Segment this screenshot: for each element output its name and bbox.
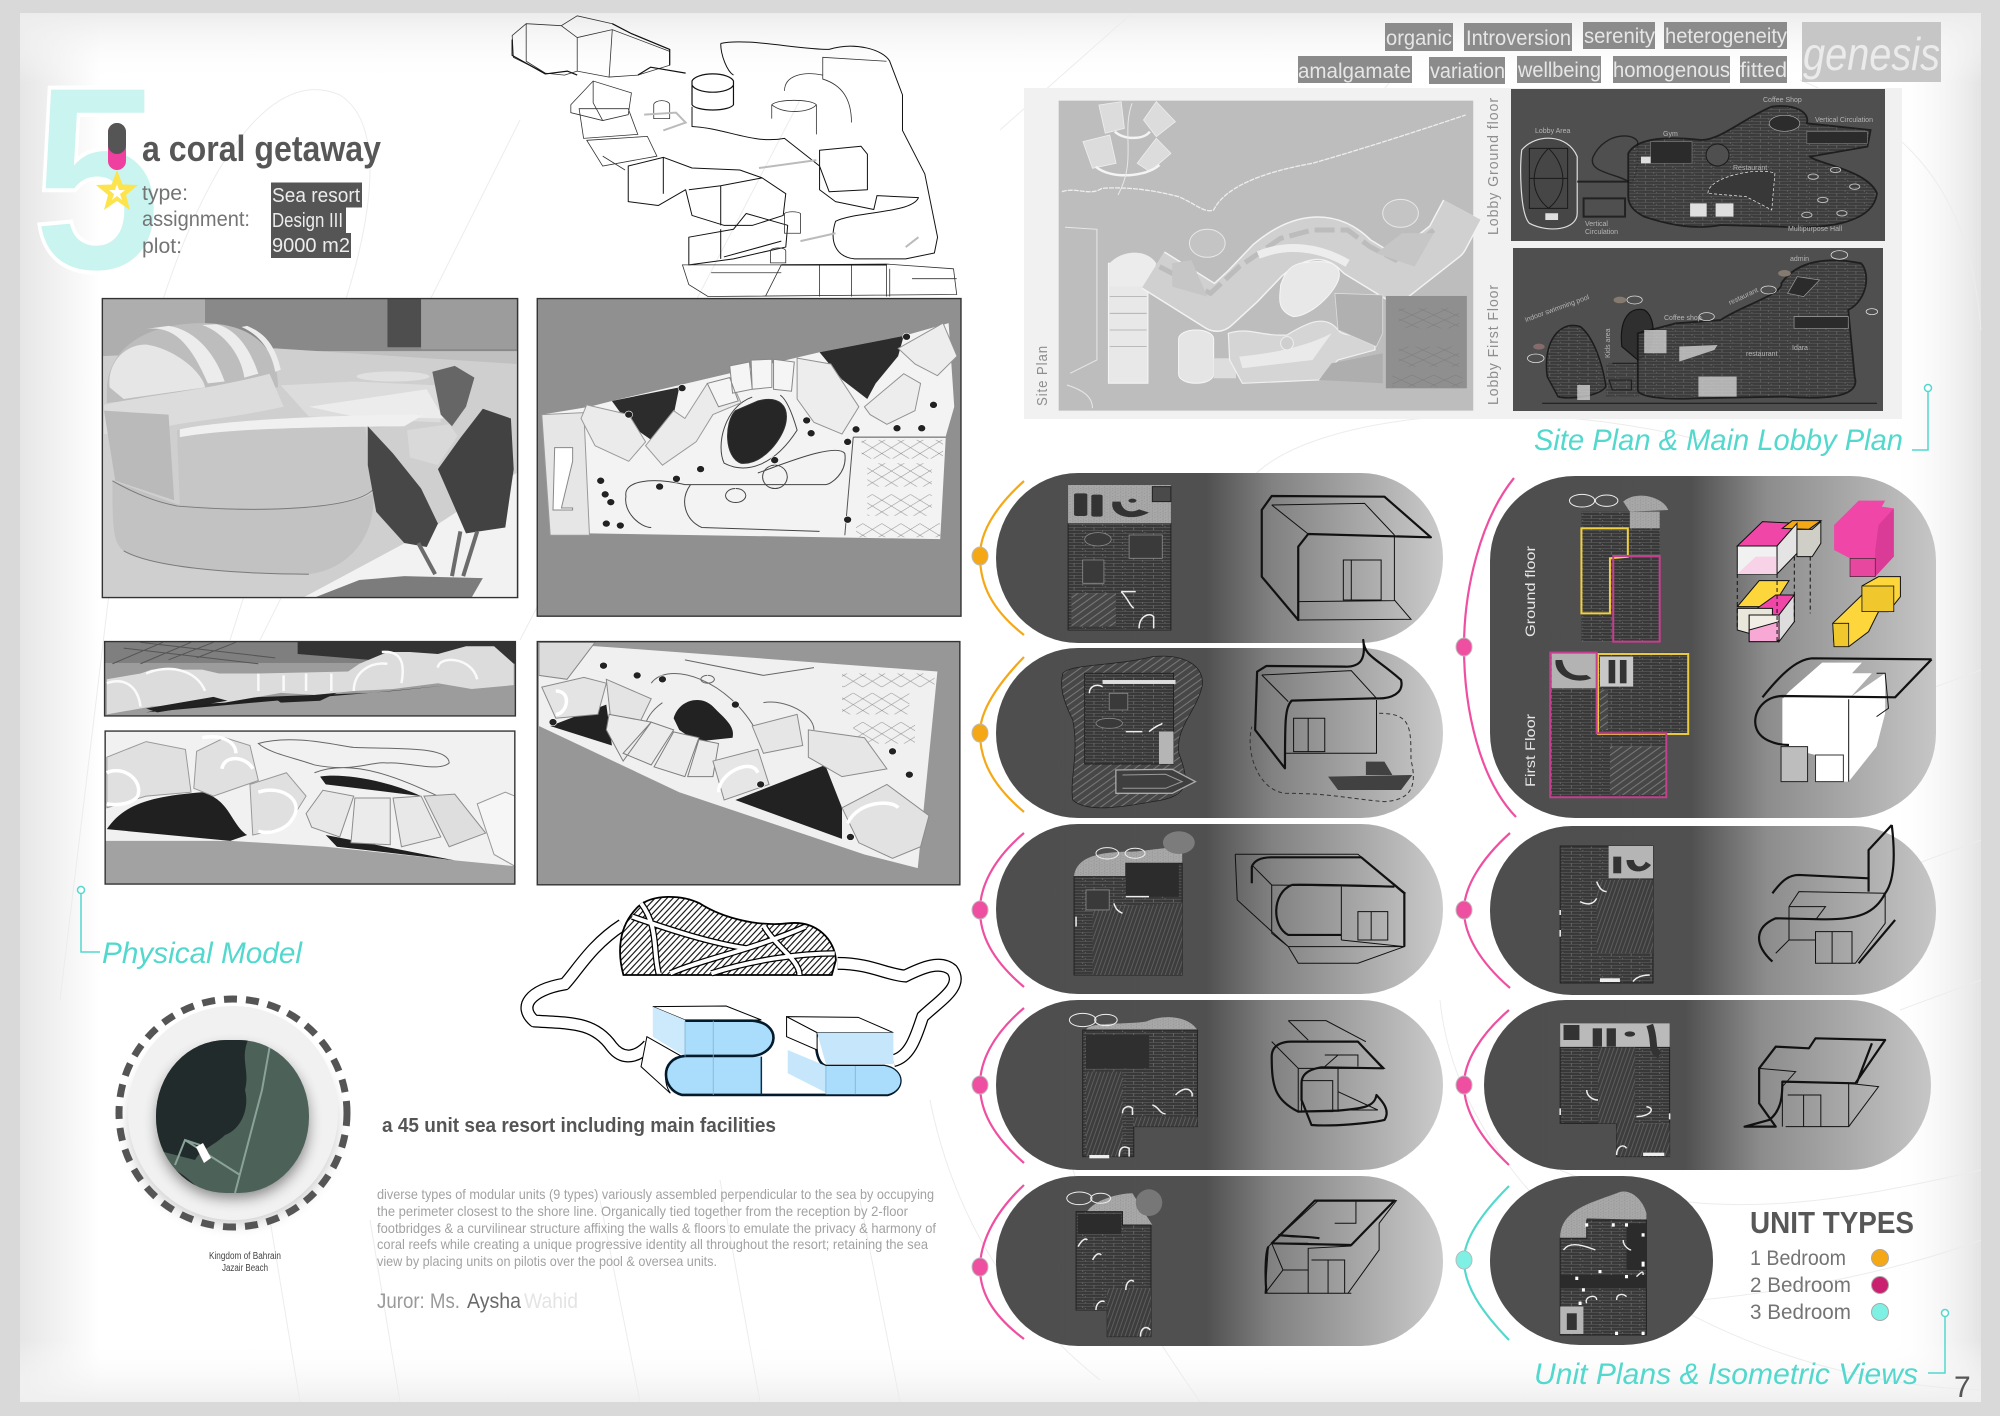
keyword tags: wellbeing <box>1517 59 1601 82</box>
panel: site plan and lobby plans <box>1024 88 1902 419</box>
location map: Kingdom of Bahrain <box>209 1251 281 1262</box>
juror credit: Aysha <box>467 1290 521 1313</box>
lobby ground floor plan: Multipurpose Hall <box>1788 226 1843 233</box>
lobby first floor plan: restaurant <box>1746 351 1778 358</box>
lobby ground floor plan: Vertical <box>1585 221 1608 228</box>
legend: unit types: 1 Bedroom <box>1750 1247 1846 1270</box>
lobby first floor plan: Idara <box>1792 345 1808 352</box>
keyword tags: homogenous <box>1613 59 1730 82</box>
keyword tags: fitted <box>1740 59 1787 82</box>
project info: Design III <box>272 210 343 232</box>
project info: type: <box>142 182 188 205</box>
floor labels <box>1522 546 1538 787</box>
photo: model oblique view <box>537 642 960 885</box>
juror credit: Juror: Ms. <box>377 1290 460 1313</box>
description paragraph: the perimeter closest to the shore line. Organically tied together from the reception by 2-floor <box>377 1203 908 1219</box>
legend: unit types: UNIT TYPES <box>1750 1205 1914 1240</box>
lobby first floor plan: admin <box>1790 256 1809 263</box>
keyword tags: variation <box>1430 60 1505 83</box>
heading: physical model: Physical Model <box>102 937 303 970</box>
vertical plan labels: Site Plan <box>1034 345 1051 406</box>
lobby ground floor plan <box>1511 89 1885 241</box>
lobby ground floor plan: Gym <box>1663 131 1678 138</box>
keyword tags: organic <box>1386 27 1452 50</box>
genesis tag: genesis <box>1803 28 1940 80</box>
page number: 7 <box>1954 1371 1971 1404</box>
lobby first floor plan: Coffee shop <box>1664 315 1702 322</box>
title: a coral getaway <box>142 128 381 169</box>
lobby ground floor plan: Restaurant <box>1733 165 1767 172</box>
vertical plan labels: Lobby First Floor <box>1485 284 1502 405</box>
unit capsule: 2 bedroom C <box>972 1176 1443 1346</box>
unit capsule: 3 bedroom duplex with exploded isometric <box>1456 476 1936 818</box>
project info: plot: <box>142 235 182 258</box>
subtitle: a 45 unit sea resort including main facilities <box>382 1115 776 1137</box>
unit capsule: 2 bedroom D <box>1456 825 1936 995</box>
description paragraph: coral reefs while creating a unique progressive identity all throughout the resort; retaining the sea <box>377 1236 928 1252</box>
photo: close-up units <box>105 731 515 884</box>
photo: long section view <box>105 642 515 716</box>
site plan <box>1059 101 1473 411</box>
keyword tags: serenity <box>1584 25 1655 48</box>
legend: unit types <box>1750 1205 1914 1324</box>
unit capsule: 1 bedroom A <box>972 473 1443 643</box>
icon: yellow star <box>96 170 138 210</box>
project info: assignment: <box>142 208 250 231</box>
lobby first floor plan: Kids area <box>1605 328 1612 358</box>
heading: site plan and main lobby plan: Site Plan & Main Lobby Plan <box>1534 424 1903 457</box>
description paragraph <box>377 1186 936 1269</box>
axonometric line drawing <box>512 16 957 296</box>
floor labels: First Floor <box>1522 714 1538 787</box>
lobby first floor plan: indoor swimming pool <box>1524 294 1591 324</box>
heading: unit plans and isometric views <box>1534 1310 1948 1391</box>
description paragraph: footbridges & a curvilinear structure affixing the walls & floors to emulate the privacy & harmony of <box>377 1220 936 1236</box>
legend: unit types: 2 Bedroom <box>1750 1274 1851 1297</box>
keyword tags: Introversion <box>1466 27 1571 50</box>
location map <box>119 999 347 1274</box>
panel: physical model photos <box>102 299 961 885</box>
project info: Sea resort <box>272 185 360 207</box>
floor labels: Ground floor <box>1522 546 1538 637</box>
concept diagram: reef and units <box>527 897 955 1095</box>
keyword tags: heterogeneity <box>1665 25 1787 48</box>
vertical plan labels <box>1034 97 1502 406</box>
icon: pink capsule <box>108 123 126 170</box>
heading: physical model <box>78 886 303 970</box>
juror credit <box>377 1290 578 1313</box>
unit capsule: 2 bedroom E <box>1456 1000 1931 1170</box>
juror credit: Wahid <box>524 1290 578 1313</box>
heading: unit plans and isometric views: Unit Plans & Isometric Views <box>1534 1358 1918 1391</box>
keyword tags: amalgamate <box>1298 60 1411 83</box>
heading: site plan and main lobby plan <box>1534 384 1932 457</box>
big cyan number 5: 5 <box>32 31 162 327</box>
photo: lobby dome model <box>102 299 519 598</box>
unit capsule: 2 bedroom A <box>972 824 1443 994</box>
unit capsule: 1 bedroom B <box>972 640 1443 818</box>
lobby ground floor plan: Coffee Shop <box>1763 97 1802 104</box>
lobby ground floor plan: Lobby Area <box>1535 128 1571 135</box>
lobby ground floor plan: Circulation <box>1585 229 1618 236</box>
lobby first floor plan <box>1513 248 1883 411</box>
vertical plan labels: Lobby Ground floor <box>1485 97 1502 235</box>
keyword tags <box>1298 22 1787 84</box>
unit capsule: 3 bedroom <box>1456 1176 1713 1345</box>
description paragraph: diverse types of modular units (9 types) variously assembled perpendicular to the sea by occupying <box>377 1186 934 1202</box>
lobby first floor plan: restaurant <box>1728 287 1759 307</box>
description paragraph: view by placing units on pilotis over the pool & oversea units. <box>377 1253 717 1269</box>
legend: unit types: 3 Bedroom <box>1750 1301 1851 1324</box>
unit capsule: 2 bedroom B <box>972 1000 1443 1170</box>
lobby ground floor plan: Vertical Circulation <box>1815 117 1873 124</box>
project info: 9000 m2 <box>272 235 350 257</box>
project info <box>142 182 362 258</box>
photo: model top view <box>537 299 961 616</box>
location map: Jazair Beach <box>222 1263 268 1274</box>
